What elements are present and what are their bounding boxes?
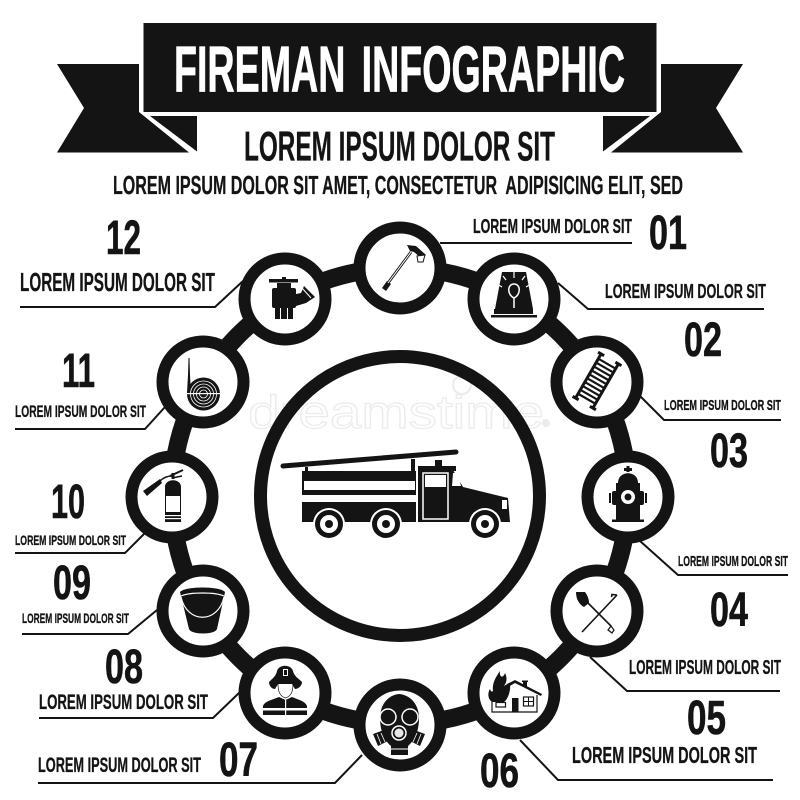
step 06: burning house xyxy=(474,652,554,734)
step 12: water nozzle xyxy=(244,258,326,340)
icon: hydrant xyxy=(609,466,647,522)
icon: shovel and hook xyxy=(576,592,617,633)
step 04: hydrant xyxy=(588,456,668,538)
label 01: 01 xyxy=(649,207,687,260)
label 03 xyxy=(640,396,781,478)
label 01 xyxy=(440,207,687,260)
label 12: LOREM IPSUM DOLOR SIT xyxy=(20,269,215,297)
icon: axe xyxy=(382,245,426,291)
icon: gas mask xyxy=(373,694,425,755)
label 11 xyxy=(15,345,165,429)
label 05 xyxy=(590,657,781,745)
label 07: LOREM IPSUM DOLOR SIT xyxy=(38,754,201,777)
label 10 xyxy=(15,476,146,553)
banner left fold xyxy=(150,116,197,152)
banner xyxy=(57,23,743,152)
banner right fold xyxy=(603,116,650,152)
label 07 xyxy=(38,734,362,787)
label 11: LOREM IPSUM DOLOR SIT xyxy=(15,403,146,421)
label 10: LOREM IPSUM DOLOR SIT xyxy=(15,532,126,548)
label 08: 08 xyxy=(105,641,143,694)
label 12: 12 xyxy=(106,212,141,265)
label 10: 10 xyxy=(51,476,85,529)
step 05: shovel and hook xyxy=(556,570,638,652)
label 09 xyxy=(22,557,157,634)
center panel: fire truck xyxy=(248,356,550,636)
label 06: 06 xyxy=(480,745,519,798)
label 01: LOREM IPSUM DOLOR SIT xyxy=(473,216,632,238)
label 11: 11 xyxy=(62,345,95,398)
center circle xyxy=(260,356,540,636)
label 12 xyxy=(20,212,243,307)
icon: burning house xyxy=(488,671,542,712)
banner right tail xyxy=(611,64,743,152)
step 09: bucket xyxy=(162,570,244,652)
step 11: fire hose reel xyxy=(162,342,244,422)
label 08: LOREM IPSUM DOLOR SIT xyxy=(39,691,208,714)
icon: ladder xyxy=(572,351,622,411)
label 09: 09 xyxy=(53,557,91,610)
step 07: gas mask xyxy=(360,684,440,766)
watermark xyxy=(248,376,550,438)
banner left tail xyxy=(57,64,189,152)
label 02 xyxy=(558,280,766,367)
icon: hose reel xyxy=(187,358,220,410)
subtitle: LOREM IPSUM DOLOR SIT xyxy=(244,122,555,170)
label 05: 05 xyxy=(687,692,726,745)
label 06 xyxy=(480,740,773,798)
label 02: 02 xyxy=(684,314,722,367)
label 09: LOREM IPSUM DOLOR SIT xyxy=(22,610,129,626)
icon: siren xyxy=(491,272,537,318)
ring connector xyxy=(172,268,628,724)
label 04 xyxy=(640,541,788,637)
truck xyxy=(283,452,510,540)
icon: fireman xyxy=(263,666,307,715)
label 04: 04 xyxy=(710,584,748,637)
step 03: ladder xyxy=(556,342,638,422)
icon: bucket xyxy=(180,588,225,634)
step 02: siren xyxy=(474,258,554,340)
label 08 xyxy=(39,641,240,718)
step 10: fire extinguisher xyxy=(132,456,212,538)
step 08: fireman xyxy=(244,652,326,734)
label 07: 07 xyxy=(219,734,258,787)
step 01: axe xyxy=(360,228,440,308)
banner main rectangle xyxy=(144,23,656,112)
watermark: dreamstime xyxy=(248,386,544,438)
icon: water nozzle xyxy=(269,277,315,319)
icon: fire extinguisher xyxy=(143,470,183,522)
center disc xyxy=(260,356,540,636)
label 03: 03 xyxy=(710,425,748,478)
